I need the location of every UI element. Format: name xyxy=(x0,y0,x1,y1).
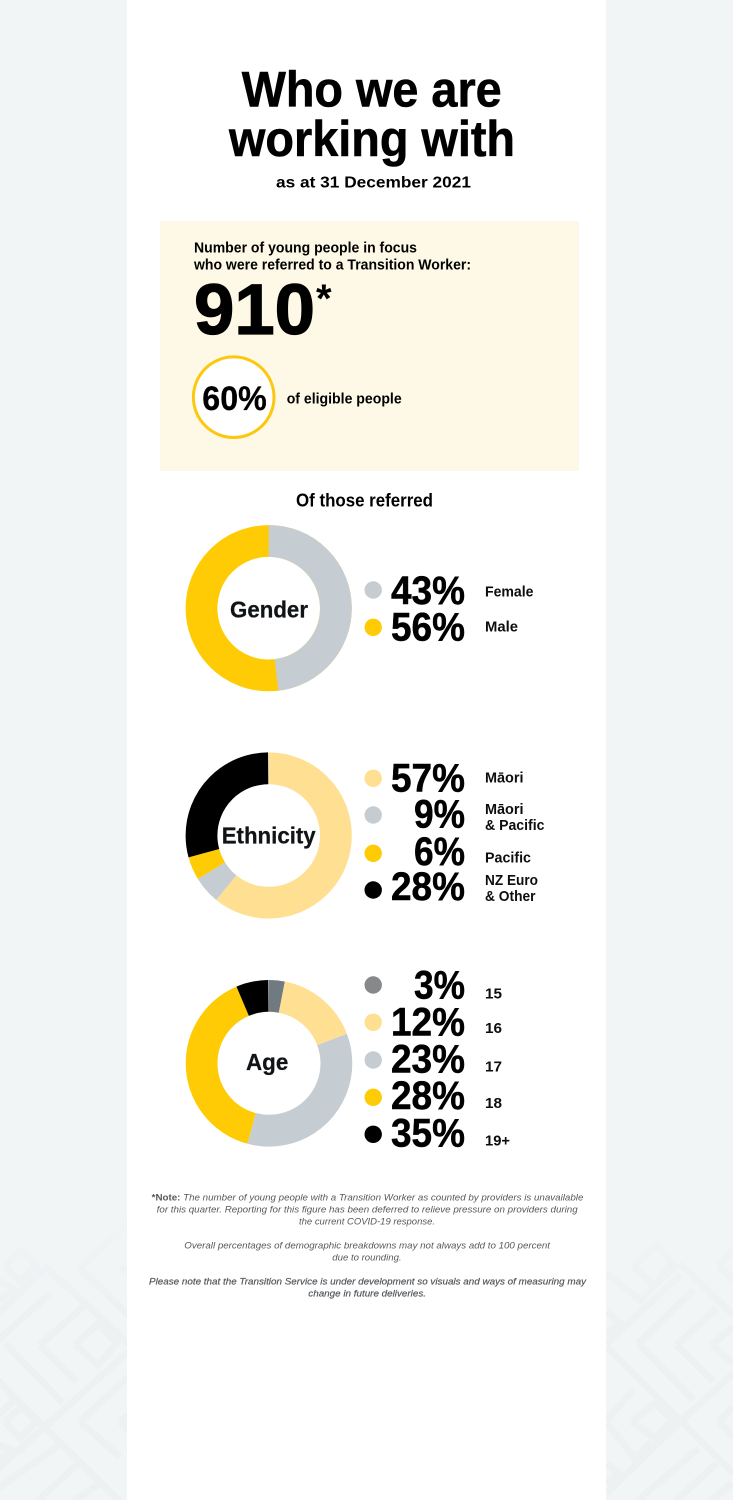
footnotes: change in future deliveries. xyxy=(308,1288,426,1299)
legend: age xyxy=(364,963,510,1156)
legend: gender: Male xyxy=(485,620,518,636)
panel: referrals xyxy=(160,221,579,471)
footnotes: for this quarter. Reporting for this figure has been deferred to relieve pressure on providers during xyxy=(157,1204,579,1215)
chart: gender donut: Gender xyxy=(230,596,308,622)
referral heading: who were referred to a Transition Worker: xyxy=(193,257,471,273)
legend: ethnicity xyxy=(364,757,544,909)
legend: age: 19+ xyxy=(485,1134,510,1150)
big number 910: 910 xyxy=(194,271,315,350)
legend: ethnicity: Pacific xyxy=(485,851,531,867)
legend: ethnicity: Māori xyxy=(485,771,524,787)
title: working with xyxy=(228,111,515,167)
legend: ethnicity: 6% xyxy=(414,830,465,874)
legend: gender: 56% xyxy=(391,606,465,650)
referral heading: Number of young people in focus xyxy=(194,241,417,257)
footnotes: Please note that the Transition Service is under development so visuals and ways of measuring may xyxy=(149,1276,587,1287)
legend: age: 12% xyxy=(391,1001,465,1045)
chart: age donut: Age xyxy=(246,1049,288,1075)
legend: ethnicity: 9% xyxy=(414,793,465,837)
legend: gender: Female xyxy=(485,585,534,601)
legend: gender: 43% xyxy=(391,569,465,613)
legend: ethnicity: 57% xyxy=(391,757,465,801)
legend: ethnicity: & Other xyxy=(485,889,536,905)
legend: ethnicity: NZ Euro xyxy=(485,873,538,889)
60 percent circle xyxy=(193,357,274,438)
footnotes: the current COVID-19 response. xyxy=(299,1215,435,1226)
legend: age: 18 xyxy=(485,1096,502,1112)
legend: age: 17 xyxy=(485,1060,502,1076)
footnotes xyxy=(149,1192,587,1299)
legend: ethnicity: Māori xyxy=(485,802,524,818)
legend: age: 35% xyxy=(391,1112,465,1156)
referral heading xyxy=(193,241,471,273)
white centre column xyxy=(127,0,606,1500)
legend: age: 28% xyxy=(391,1074,465,1118)
big number 910: * xyxy=(316,277,332,321)
legend: age: 16 xyxy=(485,1021,502,1037)
section heading: Of those referred xyxy=(296,491,433,511)
chart: gender donut xyxy=(202,541,336,675)
chart: ethnicity donut: Ethnicity xyxy=(222,822,316,848)
legend: ethnicity: 28% xyxy=(391,865,465,909)
subtitle: as at 31 December 2021 xyxy=(276,175,471,192)
title xyxy=(228,62,515,167)
footnotes: due to rounding. xyxy=(332,1252,402,1263)
legend: ethnicity: & Pacific xyxy=(485,818,544,834)
chart: ethnicity donut xyxy=(202,768,336,903)
chart: age donut xyxy=(202,996,336,1131)
eligible label: of eligible people xyxy=(287,391,402,407)
legend: gender xyxy=(364,569,534,650)
footnotes: *Note: The number of young people with a Transition Worker as counted by providers is unavailable xyxy=(152,1192,583,1203)
legend: age: 3% xyxy=(414,963,465,1007)
legend: age: 15 xyxy=(485,986,502,1002)
footnotes: Overall percentages of demographic breakdowns may not always add to 100 percent xyxy=(184,1239,550,1250)
60 percent circle: 60% xyxy=(202,380,267,418)
title: Who we are xyxy=(242,62,502,118)
legend: age: 23% xyxy=(391,1037,465,1081)
